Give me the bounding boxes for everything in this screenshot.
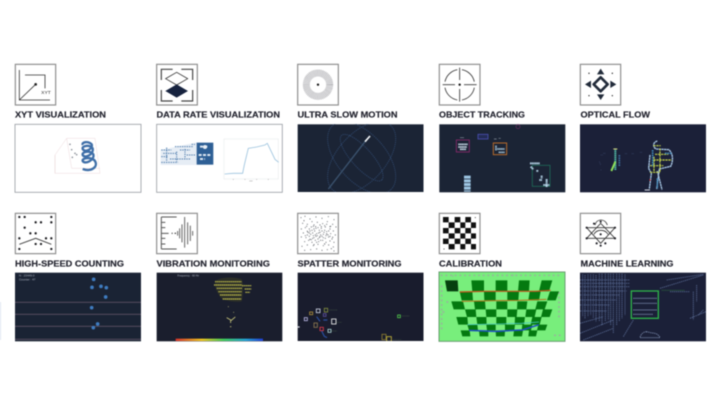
infographic grid bbox=[0, 63, 707, 342]
icon: checkerboard bbox=[439, 213, 480, 254]
panel: tracked objects bbox=[439, 124, 565, 192]
panel: object detection on event scene bbox=[580, 273, 706, 341]
panel: counted particles: N : 23449.0 bbox=[19, 274, 35, 278]
title: XYT VISUALIZATION bbox=[15, 109, 106, 119]
title: CALIBRATION bbox=[439, 258, 502, 268]
icon: crosshair bbox=[439, 64, 480, 105]
card: optical flow bbox=[580, 64, 706, 192]
card: machine learning bbox=[580, 213, 706, 341]
title: MACHINE LEARNING bbox=[580, 258, 674, 268]
card: calibration bbox=[439, 213, 565, 341]
title: DATA RATE VISUALIZATION bbox=[156, 109, 280, 119]
icon: neural network bbox=[580, 213, 621, 254]
icon: dots and line bbox=[15, 213, 56, 254]
panel: motor vibration map: Frequency : 60 Hz bbox=[177, 273, 200, 277]
title: OBJECT TRACKING bbox=[439, 109, 525, 119]
title: VIBRATION MONITORING bbox=[156, 258, 270, 268]
panel: counted particles bbox=[15, 273, 141, 341]
icon: stacked diamonds bbox=[157, 64, 197, 105]
panel: event frame and data rate chart bbox=[157, 124, 282, 192]
panel: tracked spatter particles bbox=[298, 273, 424, 341]
icon: vibration wave bbox=[157, 213, 197, 254]
panel: rotating trajectory bbox=[296, 123, 424, 193]
card: vibration monitoring bbox=[156, 213, 282, 341]
card: object tracking bbox=[439, 64, 565, 192]
panel: checkerboard detection bbox=[439, 272, 565, 341]
card: ultra slow motion bbox=[298, 64, 424, 206]
title: OPTICAL FLOW bbox=[580, 109, 650, 119]
card: high-speed counting bbox=[15, 213, 141, 341]
card: data rate visualization bbox=[156, 64, 282, 192]
title: SPATTER MONITORING bbox=[298, 258, 402, 268]
icon: scatter field bbox=[298, 213, 338, 254]
card: XYT visualization bbox=[15, 64, 141, 192]
panel: flow on walking figures bbox=[580, 124, 706, 192]
icon: radial burst bbox=[298, 64, 338, 105]
panel: counted particles: Counter : 47 bbox=[19, 277, 36, 281]
panel: 3D helix plot bbox=[15, 124, 141, 192]
card: spatter monitoring bbox=[298, 213, 424, 341]
title: ULTRA SLOW MOTION bbox=[298, 109, 398, 119]
title: HIGH-SPEED COUNTING bbox=[15, 258, 124, 268]
icon: XYT axes: XYT bbox=[41, 90, 51, 96]
icon: directional arrows bbox=[580, 64, 621, 105]
